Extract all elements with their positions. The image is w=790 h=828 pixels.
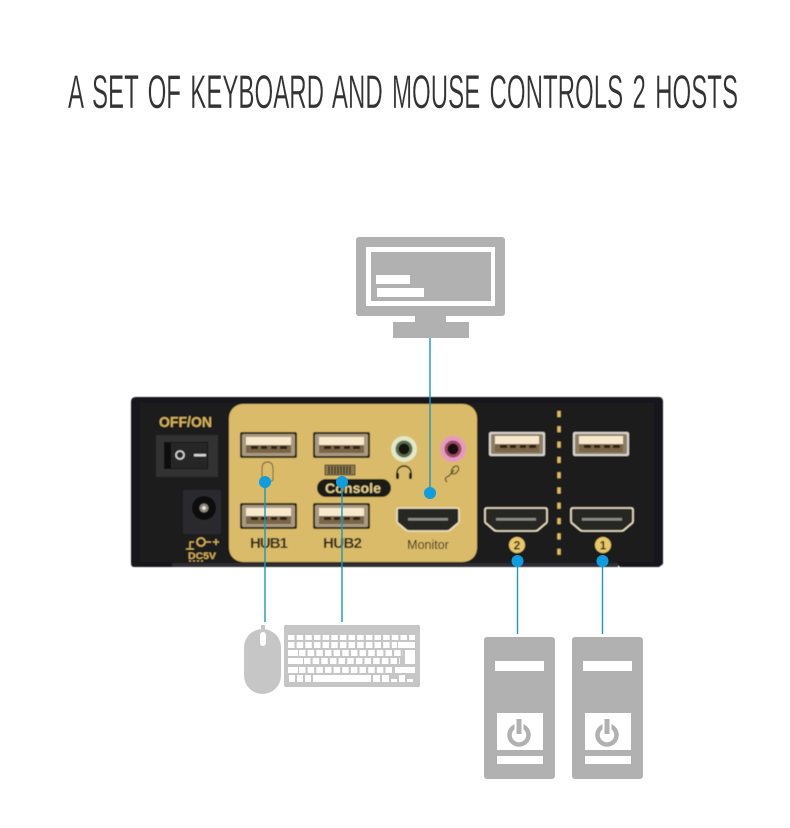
power jack (183, 490, 221, 534)
connector dots (259, 476, 608, 567)
switch label: OFF/ON (159, 414, 212, 431)
dashed divider (557, 411, 561, 555)
number badge 2: 2 (514, 538, 521, 552)
icon: mouse (244, 625, 281, 694)
hub labels: HUB2 (323, 535, 362, 552)
console label: Console (325, 481, 382, 496)
icon: host computer 1 (572, 637, 643, 779)
number badge 1 (595, 537, 611, 553)
icon: small keyboard (325, 465, 355, 475)
hub labels: HUB1 (250, 535, 288, 552)
device body (131, 397, 663, 567)
audio jack: headphone (391, 436, 417, 479)
icon: monitor (356, 237, 505, 338)
icon: host computer 2 (484, 637, 555, 779)
icon: small mouse (262, 462, 273, 482)
audio jack: microphone (440, 436, 466, 482)
host usb ports (489, 432, 629, 456)
number badge 2 (509, 537, 525, 553)
panel: KVM switch rear (131, 397, 663, 567)
DC5V label (186, 538, 219, 562)
icon: keyboard (284, 625, 420, 687)
connector lines (265, 338, 602, 634)
monitor label: Monitor (407, 538, 449, 552)
console label (317, 479, 391, 497)
rocker switch (156, 435, 218, 477)
number badge 1: 1 (600, 538, 607, 552)
gold panel (229, 404, 477, 562)
hdmi port monitor (397, 508, 459, 531)
usb ports console (240, 432, 370, 529)
hub labels (250, 535, 362, 552)
host hdmi ports (485, 508, 633, 531)
DC5V label: DC5V (188, 551, 217, 562)
